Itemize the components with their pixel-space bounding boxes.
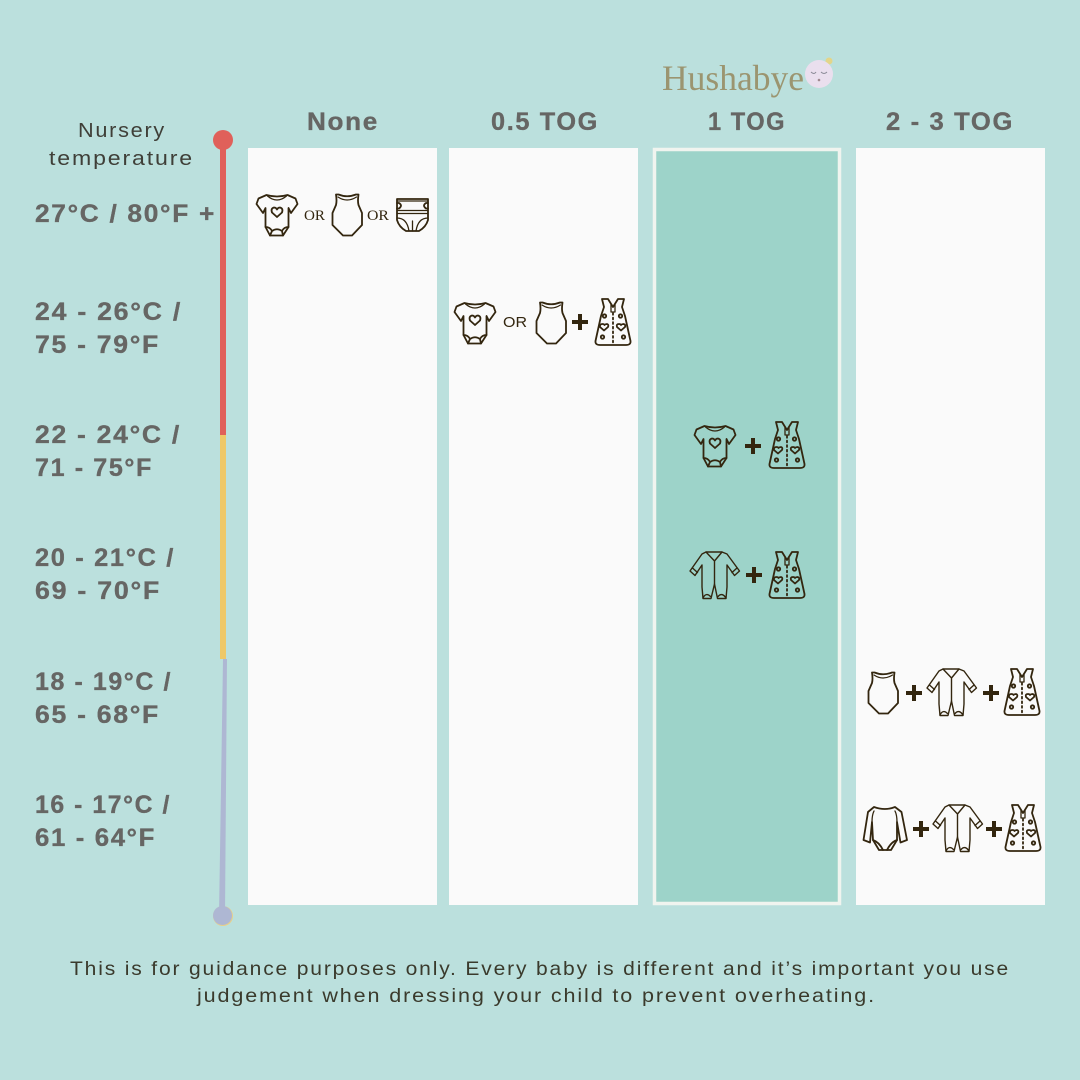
temperature label: 27°C: 27°C / 80°F + [35, 200, 216, 228]
panel: 0.5 TOG column [449, 148, 638, 905]
footer note: This is for guidance purposes only. Every baby is different and it’s important you use [70, 958, 1010, 980]
footer note [70, 958, 1010, 1007]
outfit: bodysuit or tank or nappy: OR [304, 208, 325, 224]
temperature label: 24-26°C [35, 298, 182, 359]
footer note: judgement when dressing your child to prevent overheating. [196, 985, 876, 1007]
outfit: tank plus sleepsuit plus sleep bag [868, 669, 1040, 716]
heading: Nursery temperature [49, 120, 194, 170]
outfit: sleepsuit plus sleep bag [690, 552, 805, 598]
heading: 1 TOG: 1 TOG [708, 108, 786, 136]
temperature label: 16-17°C [35, 791, 171, 852]
heading: 2 - 3 TOG: 2 - 3 TOG [886, 108, 1014, 136]
outfit: bodysuit or tank or nappy: OR [367, 208, 389, 224]
heading: Nursery temperature: temperature [49, 148, 194, 170]
temperature label: 22-24°C [35, 421, 181, 482]
logo: Hushabye: Hushabye [662, 58, 804, 98]
temperature label: 18-19°C: 65 - 68°F [35, 701, 160, 729]
heading: Nursery temperature: Nursery [78, 120, 166, 142]
temperature label: 20-21°C: 69 - 70°F [35, 577, 161, 605]
outfit: bodysuit or tank or nappy [256, 194, 428, 236]
outfit: bodysuit or tank plus sleep bag [454, 299, 631, 345]
temperature label: 18-19°C: 18 - 19°C / [35, 668, 172, 696]
thermometer scale [213, 130, 233, 926]
temperature label: 24-26°C: 24 - 26°C / [35, 298, 182, 326]
temperature label: 24-26°C: 75 - 79°F [35, 331, 160, 359]
heading: 0.5 TOG: 0.5 TOG [491, 108, 599, 136]
temperature label: 18-19°C [35, 668, 172, 729]
outfit: bodysuit or tank plus sleep bag: OR [503, 315, 527, 331]
temperature label: 20-21°C: 20 - 21°C / [35, 544, 175, 572]
outfit: long sleeve bodysuit plus sleepsuit plus sleep bag [864, 805, 1041, 852]
panel: 2-3 TOG column [856, 148, 1045, 905]
temperature label: 20-21°C [35, 544, 175, 605]
temperature label: 16-17°C: 61 - 64°F [35, 824, 156, 852]
heading: None: None [307, 108, 379, 136]
temperature label: 22-24°C: 71 - 75°F [35, 454, 153, 482]
outfit: bodysuit plus sleep bag [694, 422, 805, 468]
temperature label: 16-17°C: 16 - 17°C / [35, 791, 171, 819]
temperature label: 22-24°C: 22 - 24°C / [35, 421, 181, 449]
panel: None column [248, 148, 437, 905]
panel: 1 TOG column (highlighted) [654, 150, 840, 904]
